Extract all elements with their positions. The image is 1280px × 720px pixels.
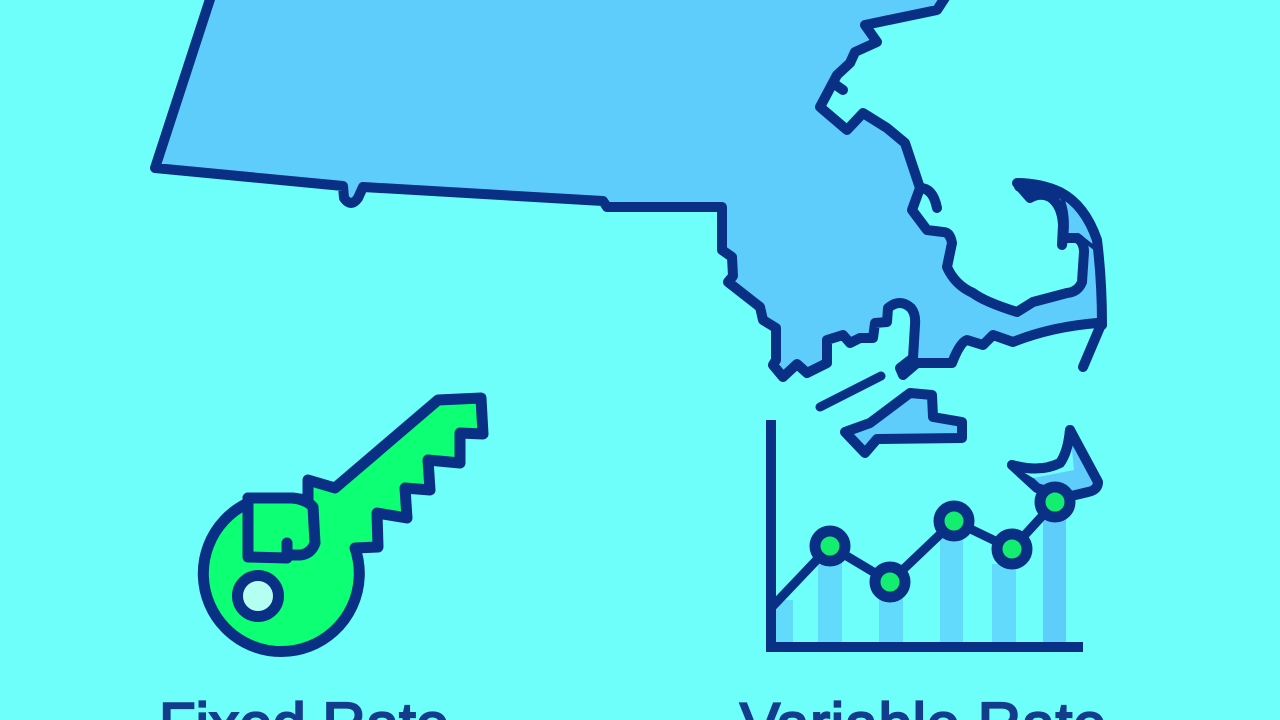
map: Massachusetts [155,0,1102,377]
island: Elizabeth [820,376,881,407]
chart points [815,487,1070,597]
chart line [771,502,1055,608]
icon: key [203,398,483,652]
key hole [238,576,278,616]
island: Nantucket [1012,430,1098,497]
chart: variable rate [771,420,1098,647]
island: Martha's Vineyard [845,393,962,453]
chart bars [776,515,1066,643]
chart axes [771,420,1083,647]
